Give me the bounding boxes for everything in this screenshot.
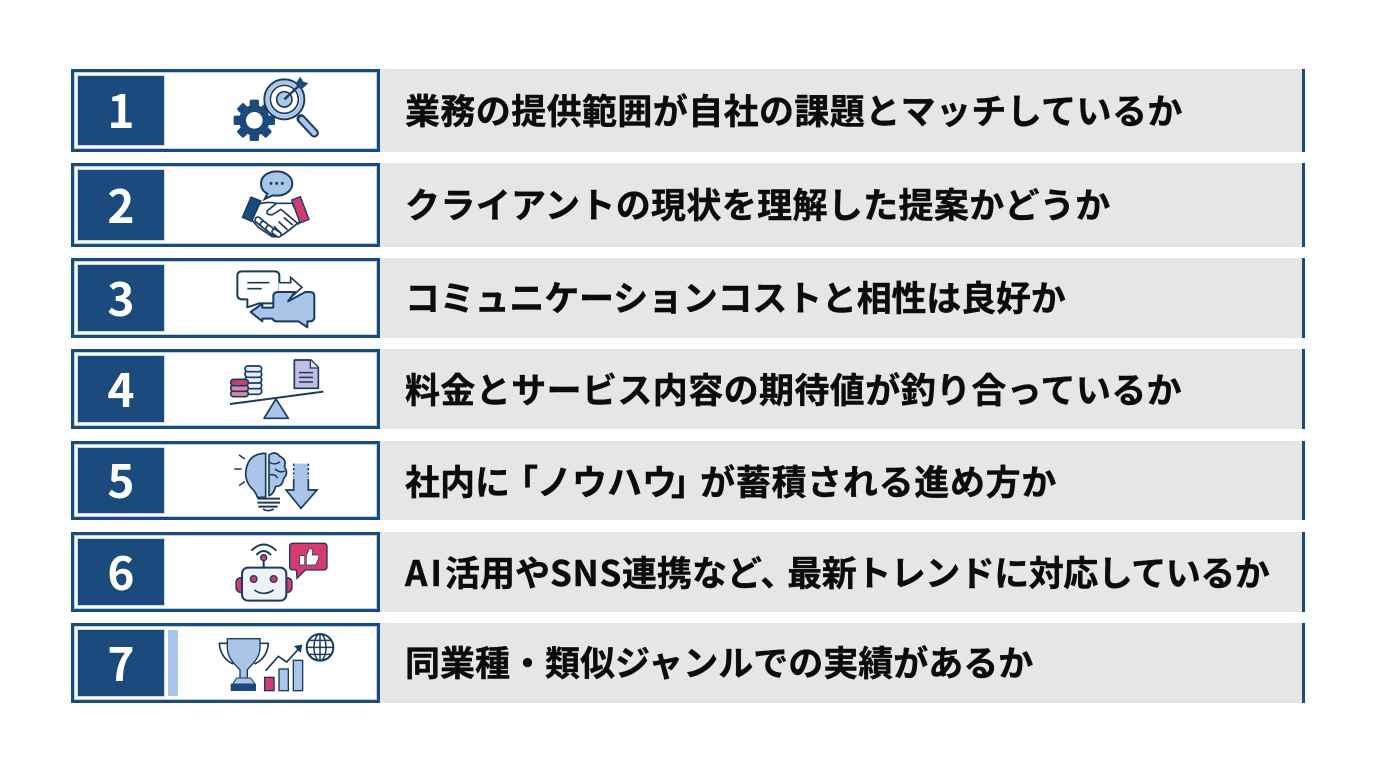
row 5 card xyxy=(71,441,380,520)
row 3 card xyxy=(71,258,380,338)
row 4 number: 4 xyxy=(107,354,135,420)
icon: robot and thumbs-up bubble xyxy=(235,542,328,602)
icon: trophy, growth chart and globe xyxy=(218,633,334,692)
item 3 text: コミュニケーションコストと相性は良好か xyxy=(405,271,1066,322)
light blue accent strip xyxy=(168,630,178,696)
icon: handshake and speech bubble xyxy=(242,170,310,238)
row 2 card xyxy=(71,163,380,247)
row 4 card xyxy=(71,349,380,429)
row 1 xyxy=(71,69,1305,152)
item 1 text: 業務の提供範囲が自社の課題とマッチしているか xyxy=(405,84,1183,135)
row 5 bar xyxy=(380,441,1305,520)
row 6 number: 6 xyxy=(107,538,135,604)
row 1 card xyxy=(71,69,380,152)
row 6 card xyxy=(71,532,380,612)
row 6 xyxy=(71,532,1305,612)
item 2 text: クライアントの現状を理解した提案かどうか xyxy=(405,178,1111,229)
icon: exchanging chat bubbles xyxy=(236,270,316,328)
row 7 number xyxy=(78,630,164,696)
row 3 number xyxy=(78,265,164,331)
checklist xyxy=(71,69,1305,703)
row 6 number xyxy=(78,539,164,605)
row 1 bar xyxy=(380,69,1305,152)
row 5 number: 5 xyxy=(107,446,135,512)
row 1 number xyxy=(78,76,164,145)
icon: coins and document on a balance xyxy=(230,359,324,420)
row 7 xyxy=(71,623,1305,703)
row 3 xyxy=(71,258,1305,338)
row 3 bar xyxy=(380,258,1305,338)
row 5 xyxy=(71,441,1305,520)
row 2 number: 2 xyxy=(107,170,135,236)
row 7 number: 7 xyxy=(107,628,135,694)
row 4 number xyxy=(78,356,164,422)
icon: lightbulb brain and down arrow xyxy=(234,452,319,512)
row 3 number: 3 xyxy=(107,264,135,330)
item 7 text: 同業種・類似ジャンルでの実績があるか xyxy=(405,636,1033,687)
row 1 number: 1 xyxy=(107,76,135,142)
row 6 bar xyxy=(380,532,1305,612)
row 2 bar xyxy=(380,163,1305,247)
row 7 bar xyxy=(380,623,1305,703)
row 2 number xyxy=(78,170,164,240)
icon: gear and target magnifier xyxy=(234,76,319,141)
item 5 text: 社内に「ノウハウ」が蓄積される進め方か xyxy=(405,455,1057,506)
row 4 bar xyxy=(380,349,1305,429)
item 4 text: 料金とサービス内容の期待値が釣り合っているか xyxy=(405,363,1182,414)
row 5 number xyxy=(78,448,164,513)
item 6 text: AI活用やSNS連携など、最新トレンドに対応しているか xyxy=(405,546,1269,597)
row 2 xyxy=(71,163,1305,247)
row 7 card xyxy=(71,623,380,703)
row 4 xyxy=(71,349,1305,429)
